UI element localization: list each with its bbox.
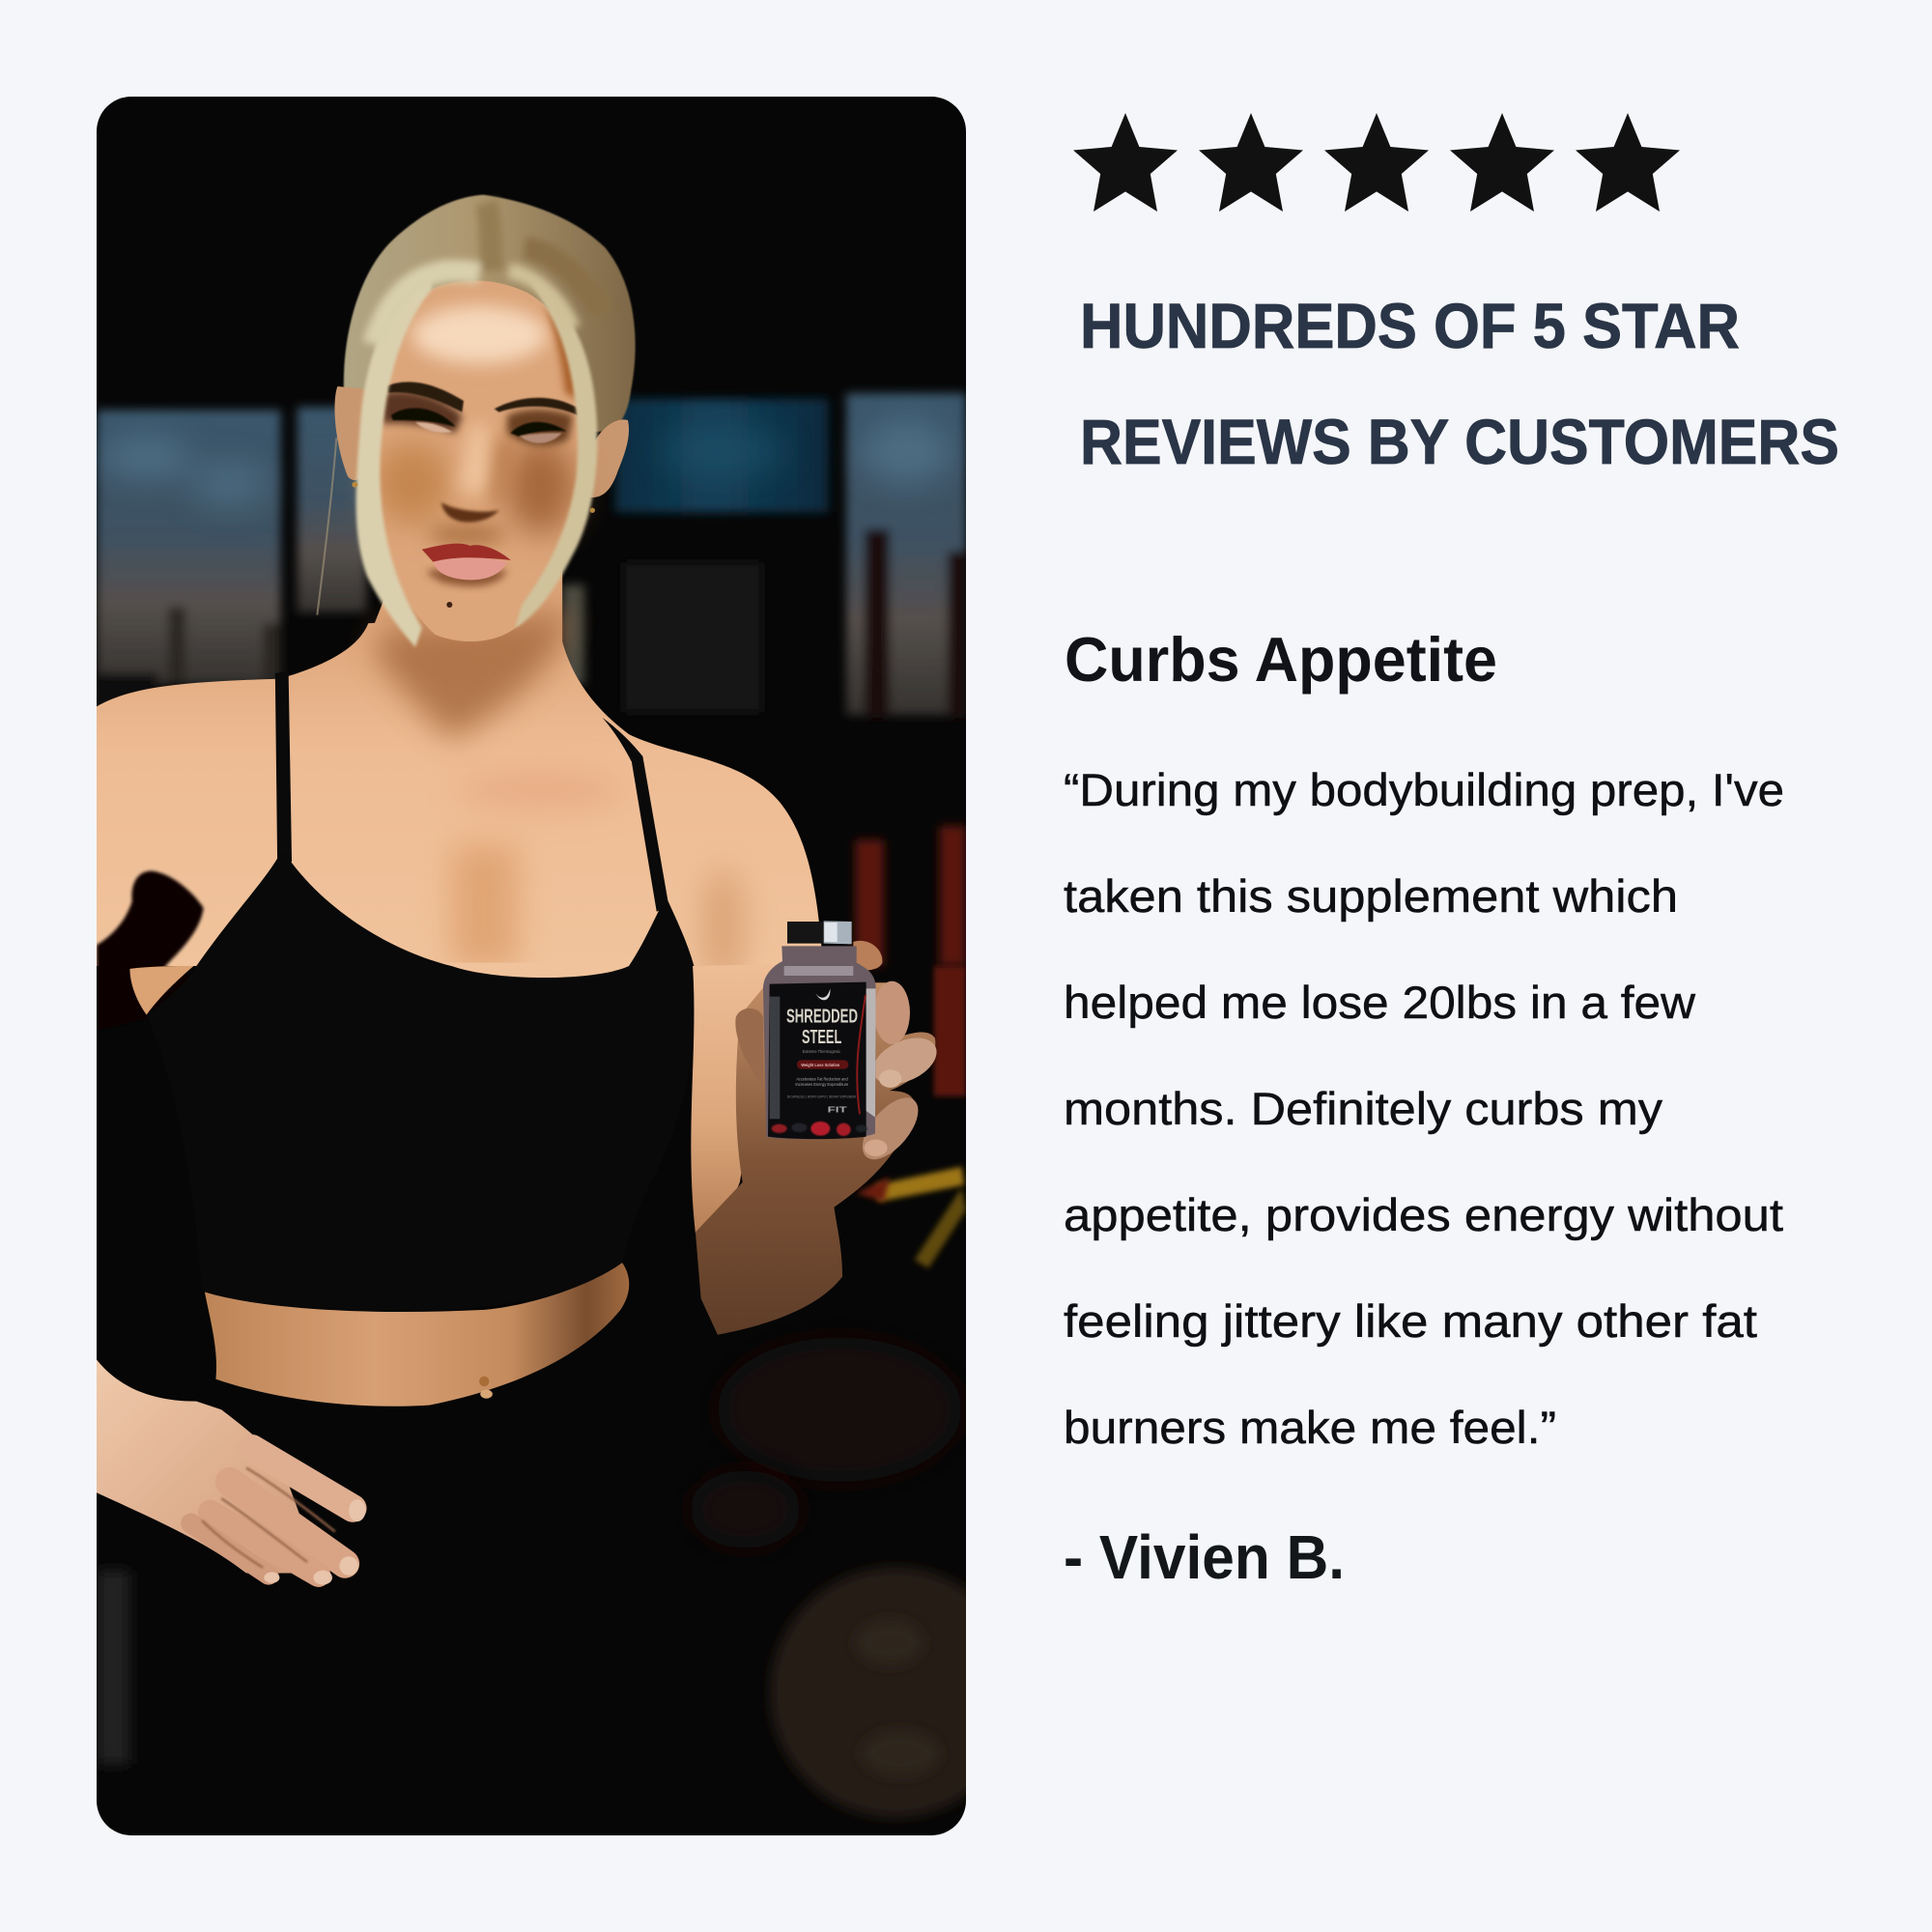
chest bottom [444,962,629,978]
cheek tones [374,441,451,525]
heading: REVIEWS BY CUSTOMERS [1080,406,1839,477]
woman's head [317,195,636,647]
body: shoulders and chest [97,612,823,966]
label pill: Weight Loss Solution [801,1063,839,1068]
background gym equipment [97,1338,1020,1817]
product bottle: STEEL [802,1026,841,1048]
neck shadow [374,612,568,740]
product bottle: Accelerates Fat Reduction and [796,1077,848,1082]
photo: upper half [97,393,966,989]
fingers [191,1448,353,1575]
product bottle: Extreme Thermogenic [803,1049,841,1054]
nose shadow [441,502,499,523]
label pill [797,1060,848,1069]
star 4 [1450,113,1554,212]
finger gap shadows [202,1467,335,1568]
product bottle: Increases Energy Expenditure [795,1082,849,1087]
review quote [1064,764,1784,1453]
left hair strand [356,278,432,647]
neck [375,570,562,642]
mole [446,602,452,608]
forehead highlight [412,306,548,364]
arm inner shading [701,867,746,989]
heading: HUNDREDS OF 5 STAR [1080,290,1740,361]
forehead side shadow [544,302,578,399]
hand on hip [97,1360,365,1585]
label side panel [770,997,780,1119]
earrings [352,482,595,513]
yellow bars [875,1167,964,1202]
window mottling [102,418,951,507]
back of hand [97,1360,319,1574]
lit patch under left arm [129,966,193,1015]
flyaway hair [317,438,336,615]
right strap [602,718,668,912]
face [370,280,582,641]
left eye socket [382,391,462,433]
right eye socket [507,410,573,445]
review quote: taken this supplement which [1064,870,1678,922]
star 3 [1324,113,1429,212]
review author: - Vivien B. [1064,1522,1345,1592]
star 1 [1073,113,1178,212]
review quote: helped me lose 20lbs in a few [1064,977,1696,1028]
review quote: feeling jittery like many other fat [1064,1295,1757,1347]
product bottle: FIT [828,1105,848,1115]
bottle glass [763,946,876,1139]
product bottle: 60 CAPSULES | 1 MONTH SUPPLY | DIETARY SUPPLEMENT [787,1094,857,1099]
panel: photo of woman holding supplement bottle [97,97,1020,1835]
eyes [391,409,567,443]
eyebrows [385,382,578,415]
nose side shadow [490,438,515,502]
bodice [147,858,694,1016]
hair [344,195,636,438]
review quote: burners make me feel.” [1064,1402,1556,1453]
ears [334,386,629,497]
heading [1080,290,1839,477]
review quote: appetite, provides energy without [1064,1189,1783,1240]
right hair strand [515,277,597,628]
stomach [205,1263,629,1406]
cleavage shading [451,845,518,967]
star rating [1073,113,1680,212]
label text: SHREDDED [786,1006,858,1028]
left strap [275,671,292,862]
review title: Curbs Appetite [1065,624,1497,695]
armpit shadow [97,868,206,966]
fingernails [264,1499,365,1585]
bottle label [768,982,867,1139]
star 5 [1576,113,1680,212]
product bottle [735,921,944,1169]
collarbone tone [474,771,606,810]
star 2 [1199,113,1303,212]
bottle cap [787,921,852,944]
nose bridge highlight [457,425,493,493]
fingers behind bottle [735,941,944,1169]
review quote: “During my bodybuilding prep, I've [1064,764,1784,815]
hair highlights [374,203,602,345]
holding hand [696,982,935,1335]
background windows [97,393,966,966]
upper lip shadow [428,524,505,546]
capsules [772,1122,867,1136]
lips [422,544,511,586]
photo: lower half [97,849,1020,1817]
right arm [691,965,775,1233]
review quote: months. Definitely curbs my [1064,1083,1663,1134]
navel piercing [479,1377,493,1399]
label logo [815,988,830,1000]
